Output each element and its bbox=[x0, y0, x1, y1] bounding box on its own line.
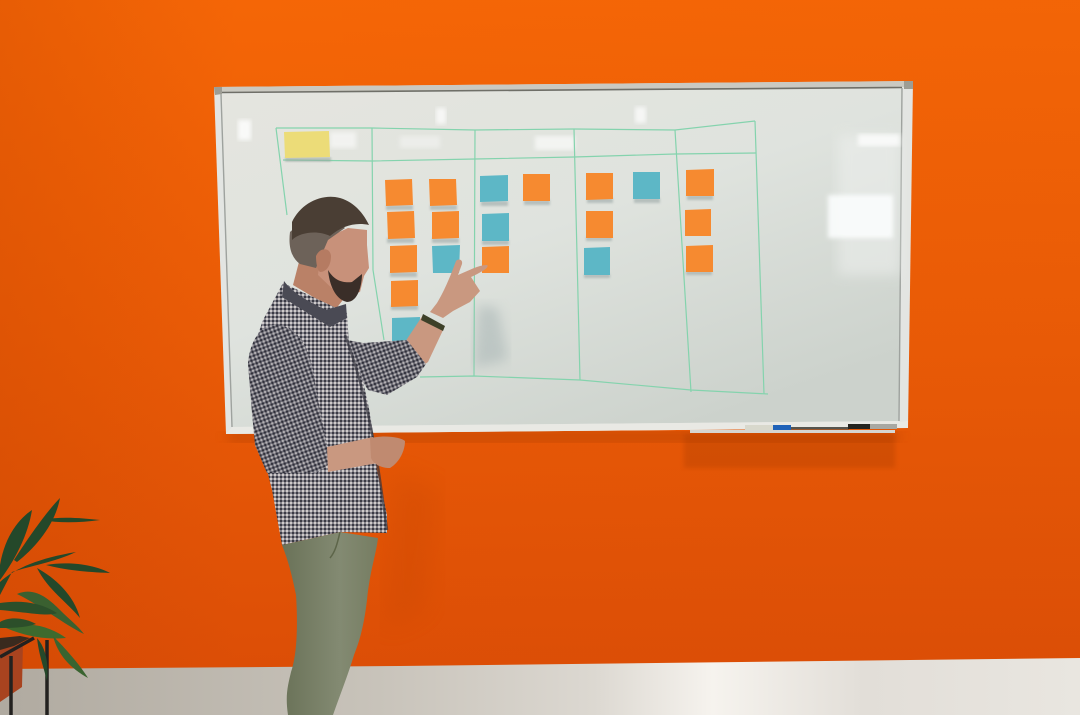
forearm near bbox=[327, 437, 378, 472]
stand bbox=[0, 638, 47, 715]
hand shadow on board bbox=[474, 305, 508, 368]
placket dark line bbox=[345, 335, 387, 530]
trouser pocket bbox=[330, 532, 340, 558]
yellow note shadow bbox=[285, 157, 331, 162]
board top rail bbox=[214, 81, 913, 93]
face bbox=[318, 228, 369, 296]
marker tray bbox=[226, 421, 908, 434]
forearm raised bbox=[405, 315, 444, 372]
marker pens bbox=[690, 424, 897, 433]
plant bbox=[0, 498, 110, 715]
shirt torso bbox=[248, 283, 387, 545]
hair bbox=[292, 197, 369, 240]
rail dark line bbox=[221, 88, 902, 92]
collar bbox=[282, 281, 347, 327]
fist bbox=[370, 437, 405, 468]
near upper arm sleeve bbox=[248, 325, 330, 473]
white skirting band bbox=[0, 658, 1080, 715]
watch band bbox=[421, 314, 445, 331]
pointing hand bbox=[430, 260, 488, 318]
corner caps bbox=[214, 81, 913, 428]
whiteboard bbox=[214, 81, 913, 434]
pot bbox=[0, 642, 23, 702]
leaves bbox=[0, 498, 110, 681]
board shadow on wall bbox=[228, 432, 898, 468]
marker grid bbox=[276, 121, 768, 394]
board reflections bbox=[238, 107, 900, 275]
neck bbox=[293, 258, 346, 310]
soil bbox=[0, 636, 30, 650]
hair fade bbox=[289, 205, 345, 268]
board frame bbox=[214, 81, 913, 434]
beard bbox=[328, 270, 362, 302]
back arm sleeve bbox=[347, 340, 426, 395]
orange notes bbox=[385, 169, 714, 307]
ear bbox=[316, 249, 331, 272]
trousers bbox=[282, 532, 378, 715]
faint shadow of man on wall bbox=[385, 470, 440, 630]
note shadows bbox=[386, 195, 713, 310]
blue notes bbox=[392, 172, 660, 345]
yellow note bbox=[284, 131, 330, 158]
frame inner shade bbox=[221, 88, 902, 427]
board surface bbox=[221, 88, 902, 427]
man bbox=[248, 197, 488, 715]
